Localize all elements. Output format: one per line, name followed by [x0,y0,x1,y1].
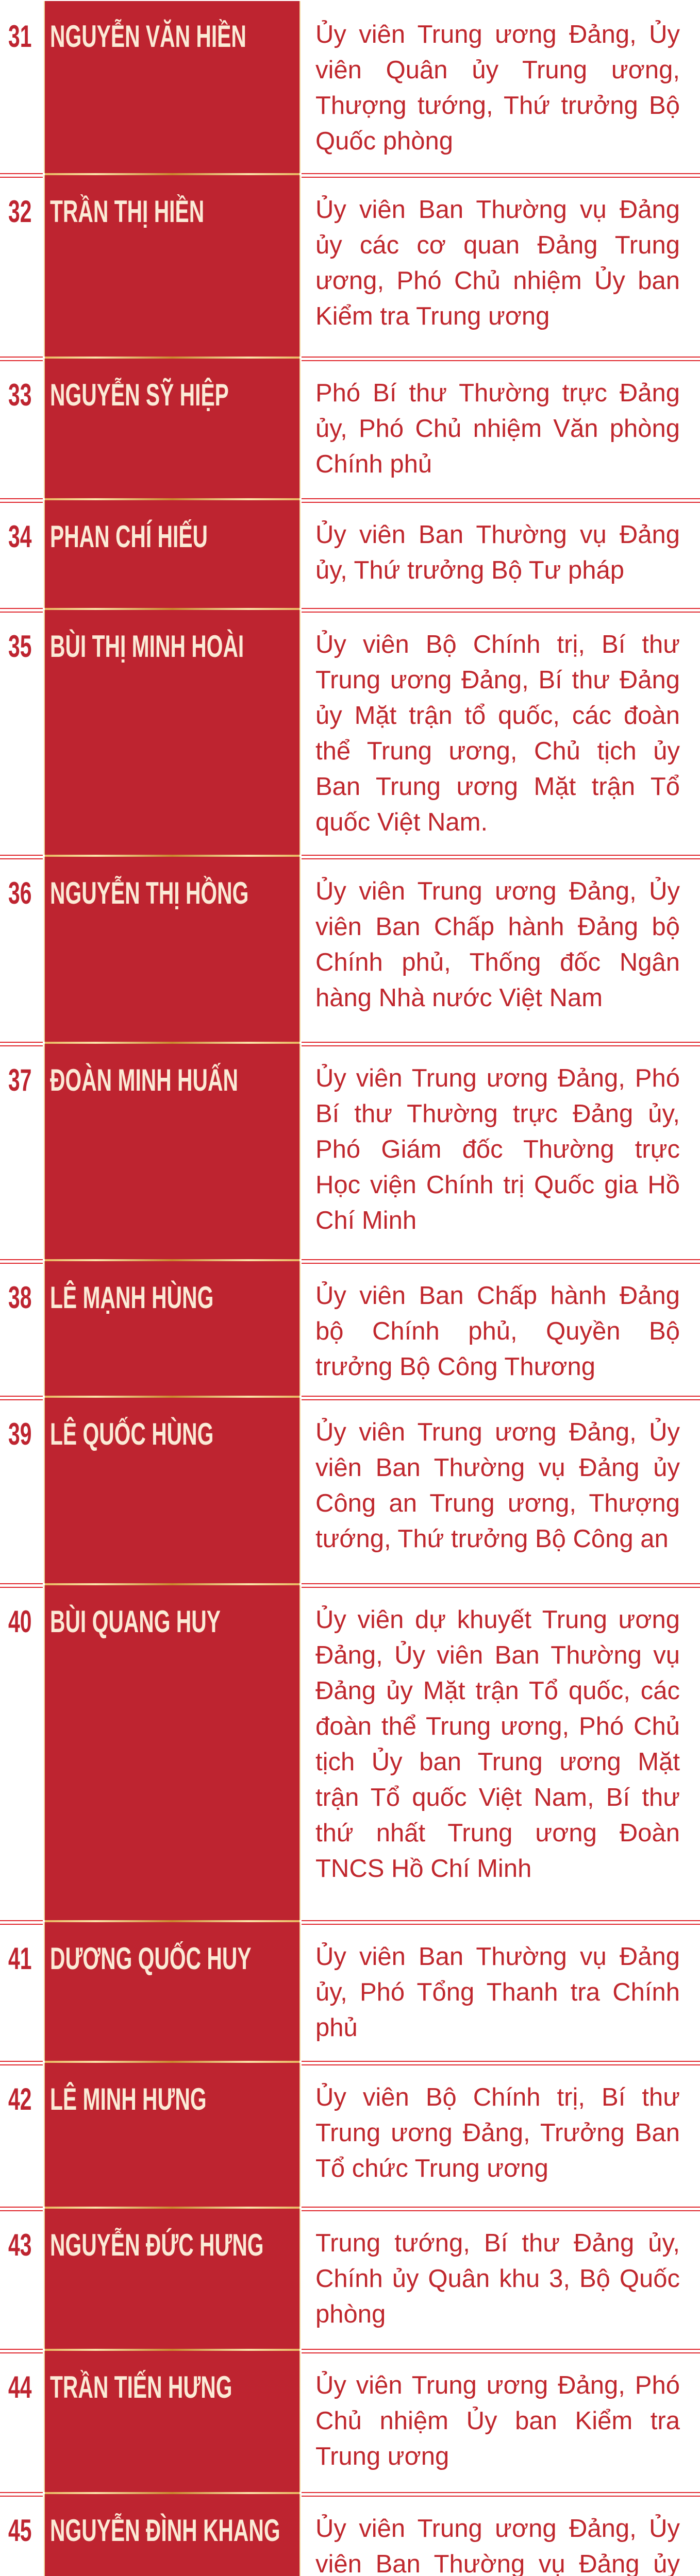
name: BÙI QUANG HUY [50,1604,221,1639]
row 41 [8,1922,680,2061]
row 32 [8,175,680,357]
description: ủy các cơ quan Đảng Trung [315,231,680,259]
description: Quốc phòng [315,127,453,155]
description: Ủy viên Trung ương Đảng, Phó [315,2371,680,2399]
row 31 [8,1,680,173]
description [315,520,680,584]
row 42 [8,2063,680,2207]
description [315,877,680,1012]
description: viên Ban Thường vụ Đảng ủy [315,1454,680,1482]
name: NGUYỄN ĐỨC HƯNG [50,2228,264,2262]
number: 37 [8,1063,31,1097]
number: 43 [8,2228,31,2262]
description: Trung tướng, Bí thư Đảng ủy, [315,2229,680,2257]
name: LÊ QUỐC HÙNG [50,1417,213,1451]
description: Chí Minh [315,1207,416,1234]
description: ủy Mặt trận tổ quốc, các đoàn [315,702,680,730]
description: ương, Phó Chủ nhiệm Ủy ban [315,267,680,295]
description: quốc Việt Nam. [315,808,488,836]
description [315,2514,680,2576]
description [315,1418,680,1553]
row 33 [8,359,680,498]
description [315,1281,680,1381]
description: Công an Trung ương, Thượng [315,1489,680,1517]
description: tịch Ủy ban Trung ương Mặt [315,1748,680,1776]
description: đoàn thể Trung ương, Phó Chủ [315,1713,680,1740]
description: Trung ương [315,2443,449,2470]
name: NGUYỄN SỸ HIỆP [50,378,229,412]
description: viên Quân ủy Trung ương, [315,56,680,84]
description: ủy, Phó Chủ nhiệm Văn phòng [315,415,680,443]
description [315,2083,680,2182]
name: LÊ MẠNH HÙNG [50,1280,213,1315]
description: TNCS Hồ Chí Minh [315,1855,531,1883]
row 37 [8,1044,680,1259]
description: thứ nhất Trung ương Đoàn [315,1819,680,1847]
description: Chính phủ [315,450,432,478]
description: Ủy viên Ban Chấp hành Đảng [315,1282,680,1310]
name: ĐOÀN MINH HUẤN [50,1063,238,1097]
description [315,630,680,836]
row 39 [8,1398,680,1583]
row 45 [8,2494,680,2576]
description: Trung ương Đảng, Trưởng Ban [315,2119,680,2147]
description: ủy, Phó Tổng Thanh tra Chính [315,1978,680,2006]
number: 34 [8,519,31,554]
description [315,379,680,478]
row 38 [8,1261,680,1396]
name: DƯƠNG QUỐC HUY [50,1941,252,1976]
description [315,1605,680,1883]
description: Ủy viên Trung ương Đảng, Ủy [315,2515,680,2543]
name: TRẦN THỊ HIỀN [50,194,204,229]
description: hàng Nhà nước Việt Nam [315,984,603,1012]
description: Phó Giám đốc Thường trực [315,1136,680,1163]
description: Đảng, Ủy viên Ban Thường vụ [315,1641,680,1669]
description: Ủy viên Trung ương Đảng, Ủy [315,21,680,48]
description [315,2371,680,2470]
number: 31 [8,19,31,54]
description [315,1064,680,1234]
number: 45 [8,2513,31,2548]
description: Ủy viên Trung ương Đảng, Ủy [315,877,680,905]
description: Ủy viên Ban Thường vụ Đảng [315,521,680,549]
number: 42 [8,2082,31,2116]
name: BÙI THỊ MINH HOÀI [50,629,244,664]
description: phòng [315,2300,386,2328]
name: TRẦN TIẾN HƯNG [50,2370,232,2404]
description: Phó Bí thư Thường trực Đảng [315,379,680,407]
description: Bí thư Thường trực Đảng ủy, [315,1100,680,1128]
number: 35 [8,629,31,664]
description: phủ [315,2014,358,2042]
description: Tổ chức Trung ương [315,2155,548,2182]
number: 39 [8,1417,31,1451]
description [315,2229,680,2328]
number: 36 [8,876,31,910]
description: Chính phủ, Thống đốc Ngân [315,948,680,976]
description [315,1942,680,2042]
description: trận Tổ quốc Việt Nam, Bí thư [315,1784,680,1811]
description: Kiểm tra Trung ương [315,302,549,330]
description: Ủy viên Ban Thường vụ Đảng [315,1943,680,1971]
description: Chính ủy Quân khu 3, Bộ Quốc [315,2265,680,2293]
description: bộ Chính phủ, Quyền Bộ [315,1317,680,1345]
name: NGUYỄN THỊ HỒNG [50,876,248,910]
description: trưởng Bộ Công Thương [315,1353,595,1381]
description: Ủy viên Bộ Chính trị, Bí thư [315,2083,680,2111]
description: Đảng ủy Mặt trận Tổ quốc, các [315,1677,680,1705]
description: tướng, Thứ trưởng Bộ Công an [315,1525,669,1553]
name: LÊ MINH HƯNG [50,2082,207,2116]
number: 41 [8,1941,31,1976]
description: Ủy viên Trung ương Đảng, Ủy [315,1418,680,1446]
number: 38 [8,1280,31,1315]
description: thể Trung ương, Chủ tịch ủy [315,737,680,765]
description: ủy, Thứ trưởng Bộ Tư pháp [315,556,624,584]
description: Thượng tướng, Thứ trưởng Bộ [315,92,680,120]
row 43 [8,2209,680,2349]
row 34 [8,500,680,608]
number: 44 [8,2370,31,2404]
description: Trung ương Đảng, Bí thư Đảng [315,666,680,694]
description: viên Ban Chấp hành Đảng bộ [315,913,680,941]
name: NGUYỄN VĂN HIỀN [50,19,246,54]
description: Ủy viên Ban Thường vụ Đảng [315,196,680,224]
name: PHAN CHÍ HIẾU [50,519,208,554]
description: Chủ nhiệm Ủy ban Kiểm tra [315,2407,680,2435]
number: 33 [8,378,31,412]
row 36 [8,857,680,1042]
description: Ủy viên dự khuyết Trung ương [315,1606,680,1634]
description [315,20,680,155]
description: Ban Trung ương Mặt trận Tổ [315,773,680,801]
name: NGUYỄN ĐÌNH KHANG [50,2513,280,2548]
description: Học viện Chính trị Quốc gia Hồ [315,1171,680,1199]
row 44 [8,2351,680,2492]
row 35 [8,610,680,855]
row 40 [8,1585,680,1920]
number: 40 [8,1604,31,1639]
description: Ủy viên Trung ương Đảng, Phó [315,1064,680,1092]
number: 32 [8,194,31,229]
description: Ủy viên Bộ Chính trị, Bí thư [315,631,680,658]
description [315,195,680,330]
